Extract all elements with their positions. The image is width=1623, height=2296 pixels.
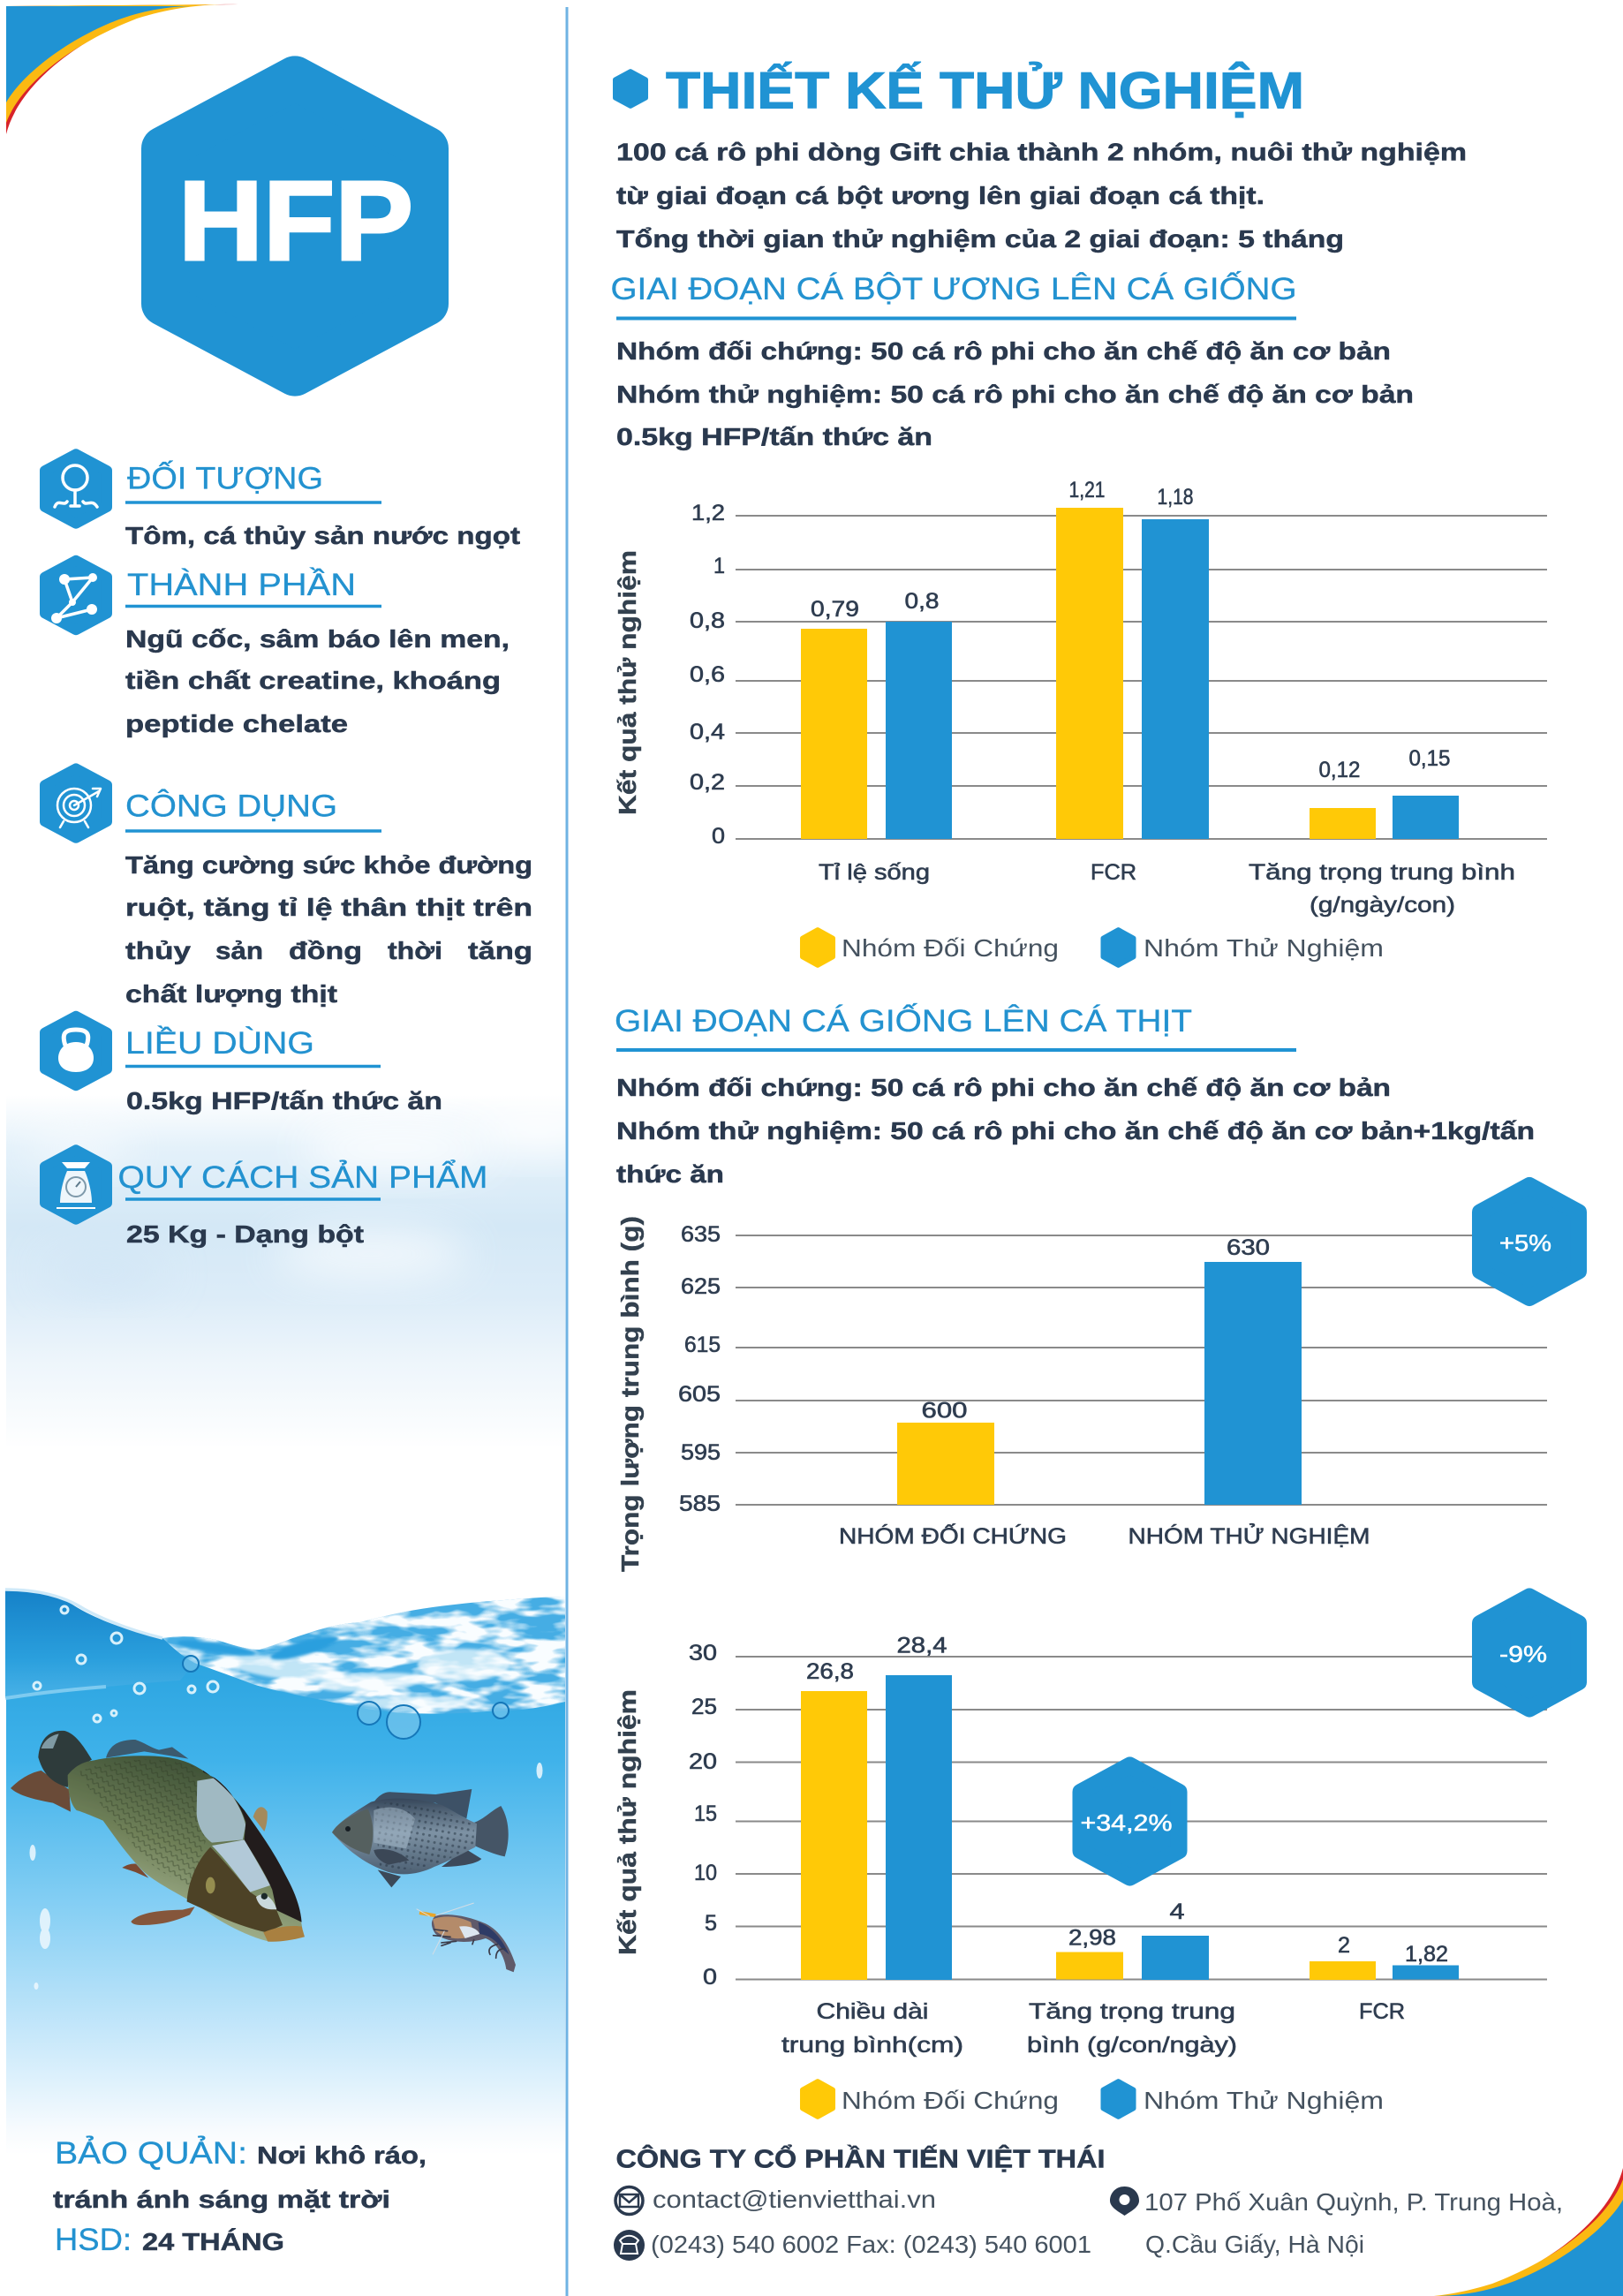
footer: company contact: 107 Phố Xuân Quỳnh, P. Trung Hoà, xyxy=(1144,2188,1563,2216)
icon: shrimp xyxy=(417,1903,516,1972)
storage and shelf life: tránh ánh sáng mặt trời xyxy=(53,2186,390,2213)
value labels: 2,98 xyxy=(1068,1925,1116,1950)
value labels: 26,8 xyxy=(806,1659,854,1684)
water wave xyxy=(5,1590,565,1739)
product logo: HFP hexagon: HFP xyxy=(178,158,413,284)
value labels: 4 xyxy=(1169,1899,1185,1924)
category labels: trung bình(cm) xyxy=(781,2033,963,2058)
value labels: 1,21 xyxy=(1068,478,1106,502)
y axis labels: 25 xyxy=(691,1695,717,1719)
footer: company contact xyxy=(614,2144,1563,2261)
corner: bottom right xyxy=(1391,2168,1623,2296)
bar chart: stage 2 results xyxy=(614,1597,1579,2117)
stage 1 groups: Nhóm thử nghiệm: 50 cá rô phi cho ăn chế độ ăn cơ bản xyxy=(616,381,1414,408)
y axis labels xyxy=(678,1222,721,1516)
legend xyxy=(803,2081,1384,2117)
y axis labels: 15 xyxy=(694,1801,717,1826)
icon: floating droplets xyxy=(30,1763,542,1990)
y axis labels xyxy=(690,501,725,849)
footer: company contact: contact@tienvietthai.vn xyxy=(653,2186,936,2213)
y axis labels: 585 xyxy=(679,1492,721,1516)
value labels: 600 xyxy=(922,1399,968,1424)
section: liều dùng xyxy=(45,1016,442,1114)
icon: molecule xyxy=(45,561,107,630)
body text: peptide chelate xyxy=(125,710,348,737)
body text: thời xyxy=(388,937,442,964)
body text xyxy=(125,851,532,1008)
y axis labels xyxy=(689,1641,717,1990)
icon: email xyxy=(615,2186,643,2215)
section: quy cách sản phẩm xyxy=(45,1150,487,1248)
body text: 25 Kg - Dạng bột xyxy=(126,1220,364,1248)
stage 2 groups: Nhóm đối chứng: 50 cá rô phi cho ăn chế độ ăn cơ bản xyxy=(616,1074,1391,1101)
category labels: Tăng trọng trung bình xyxy=(1249,860,1515,885)
y axis labels: 625 xyxy=(681,1274,721,1299)
y axis title: Kết quả thử nghiệm xyxy=(614,1689,641,1955)
vertical divider xyxy=(565,7,569,2296)
y axis labels: 0,8 xyxy=(690,608,725,633)
icon: kettlebell xyxy=(45,1016,107,1085)
trial description: 100 cá rô phi dòng Gift chia thành 2 nhóm, nuôi thử nghiệm xyxy=(616,138,1467,166)
legend: Nhóm Thử Nghiệm xyxy=(1144,2087,1384,2114)
icon: scale xyxy=(45,1150,107,1220)
stage 1 groups xyxy=(616,337,1414,450)
category labels: NHÓM ĐỐI CHỨNG xyxy=(839,1522,1067,1549)
heading: CÔNG DỤNG xyxy=(125,789,337,823)
stage 1 groups: Nhóm đối chứng: 50 cá rô phi cho ăn chế độ ăn cơ bản xyxy=(616,337,1391,365)
value labels: 0,8 xyxy=(904,589,940,614)
category labels: NHÓM THỬ NGHIỆM xyxy=(1129,1522,1370,1549)
trial description: từ giai đoạn cá bột ương lên giai đoạn cá thịt. xyxy=(616,182,1264,209)
legend xyxy=(803,930,1384,965)
y axis labels: 0 xyxy=(703,1965,717,1990)
value labels: 0,12 xyxy=(1319,758,1360,782)
icon: phone xyxy=(614,2230,645,2261)
category labels: Chiều dài xyxy=(816,1999,929,2024)
icon: big carp fish xyxy=(11,1731,305,1942)
y axis labels: 20 xyxy=(689,1749,717,1774)
bubbles xyxy=(34,1606,218,1722)
body text: thủy xyxy=(125,937,192,964)
y axis labels: 0 xyxy=(712,824,725,849)
trial description: Tổng thời gian thử nghiệm của 2 giai đoạn: 5 tháng xyxy=(616,225,1344,253)
storage and shelf life: BẢO QUẢN: xyxy=(55,2135,247,2171)
value labels: 2 xyxy=(1338,1933,1350,1958)
heading: stage 1: GIAI ĐOẠN CÁ BỘT ƯƠNG LÊN CÁ GIỐNG xyxy=(611,271,1296,306)
stage 2 groups: thức ăn xyxy=(616,1160,724,1188)
body text: ruột, tăng tỉ lệ thân thịt trên xyxy=(125,894,532,921)
legend: Nhóm Thử Nghiệm xyxy=(1144,934,1384,962)
category labels: FCR xyxy=(1091,860,1136,885)
footer: company contact: (0243) 540 6002 Fax: (0243) 540 6001 xyxy=(651,2231,1091,2258)
category labels xyxy=(819,860,1515,918)
y axis labels: 595 xyxy=(681,1440,721,1465)
heading: LIỀU DÙNG xyxy=(125,1025,314,1061)
body text xyxy=(125,625,510,737)
footer: company contact: CÔNG TY CỔ PHẦN TIẾN VIỆT THÁI xyxy=(616,2144,1106,2174)
category labels xyxy=(781,1999,1405,2058)
value labels xyxy=(811,478,1450,782)
legend: Nhóm Đối Chứng xyxy=(842,2087,1059,2114)
value labels: 28,4 xyxy=(897,1634,947,1658)
stage 2 groups xyxy=(616,1074,1535,1188)
value labels xyxy=(922,1235,1270,1424)
y axis labels: 1,2 xyxy=(691,501,725,525)
body text: tiền chất creatine, khoáng xyxy=(125,667,501,694)
y axis labels: 635 xyxy=(681,1222,721,1247)
corner: top left xyxy=(6,4,238,134)
y axis labels: 0,6 xyxy=(690,662,725,687)
icon: target xyxy=(45,768,107,838)
icon: location pin xyxy=(1110,2186,1139,2216)
callout: +34,2% xyxy=(1081,1765,1179,1877)
body text: Ngũ cốc, sâm báo lên men, xyxy=(125,625,510,653)
bar chart: average weight xyxy=(616,1185,1579,1572)
storage and shelf life: 24 THÁNG xyxy=(142,2228,284,2255)
category labels: FCR xyxy=(1359,1999,1405,2024)
storage and shelf life xyxy=(53,2135,427,2257)
storage and shelf life: Nơi khô ráo, xyxy=(257,2141,427,2169)
heading: THÀNH PHẦN xyxy=(127,567,356,602)
heading: ĐỐI TƯỢNG xyxy=(127,461,323,496)
callout: -9%: -9% xyxy=(1499,1641,1547,1667)
icon: magnifier xyxy=(45,454,107,524)
callout: +34,2%: +34,2% xyxy=(1081,1809,1173,1836)
y axis labels: 0,2 xyxy=(690,770,725,795)
y axis labels: 615 xyxy=(684,1333,721,1357)
category labels: bình (g/con/ngày) xyxy=(1027,2033,1237,2058)
y axis title: Kết quả thử nghiệm xyxy=(614,550,641,815)
body text: Tăng cường sức khỏe đường xyxy=(125,851,532,879)
y axis labels: 10 xyxy=(694,1861,717,1885)
left panel background xyxy=(5,1095,600,2155)
body text: đồng xyxy=(289,937,362,964)
category labels: Tỉ lệ sống xyxy=(819,860,930,885)
y axis labels: 1 xyxy=(713,554,725,578)
body text: 0.5kg HFP/tấn thức ăn xyxy=(126,1087,442,1114)
y axis title: Trọng lượng trung bình (g) xyxy=(616,1216,644,1572)
bars xyxy=(801,508,1459,839)
section: đối tượng xyxy=(45,454,520,549)
stage 1 groups: 0.5kg HFP/tấn thức ăn xyxy=(616,423,932,450)
category labels: Tăng trọng trung xyxy=(1029,1999,1235,2024)
category labels: (g/ngày/con) xyxy=(1310,893,1455,918)
main title: THIẾT KẾ THỬ NGHIỆM xyxy=(666,62,1304,120)
body text: sản xyxy=(215,937,263,964)
value labels xyxy=(806,1634,1448,1967)
callout: +5%: +5% xyxy=(1499,1229,1551,1256)
legend: Nhóm Đối Chứng xyxy=(842,934,1059,962)
y axis labels: 30 xyxy=(689,1641,717,1665)
body text: chất lượng thịt xyxy=(125,980,337,1008)
bars xyxy=(801,1675,1459,1980)
y axis labels: 605 xyxy=(678,1382,721,1407)
category labels xyxy=(839,1522,1370,1549)
icon: tilapia fish xyxy=(332,1789,509,1887)
value labels: 1,82 xyxy=(1405,1942,1448,1967)
y axis labels: 0,4 xyxy=(690,720,725,744)
storage and shelf life: HSD: xyxy=(55,2223,132,2257)
section: thành phần xyxy=(45,561,510,737)
heading: QUY CÁCH SẢN PHẨM xyxy=(118,1159,487,1195)
value labels: 0,15 xyxy=(1409,746,1450,771)
value labels: 630 xyxy=(1227,1235,1270,1260)
value labels: 1,18 xyxy=(1157,485,1194,510)
stage 2 groups: Nhóm thử nghiệm: 50 cá rô phi cho ăn chế độ ăn cơ bản+1kg/tấn xyxy=(616,1117,1535,1144)
bars xyxy=(897,1262,1302,1505)
body text: tăng xyxy=(468,937,532,964)
body text: Tôm, cá thủy sản nước ngọt xyxy=(125,522,520,549)
callout: -9% xyxy=(1480,1597,1579,1709)
value labels: 0,79 xyxy=(811,597,859,622)
footer: company contact: Q.Cầu Giấy, Hà Nội xyxy=(1145,2231,1364,2258)
section: công dụng xyxy=(45,768,532,1008)
trial description xyxy=(616,138,1467,253)
y axis labels: 5 xyxy=(705,1911,717,1936)
heading: stage 2: GIAI ĐOẠN CÁ GIỐNG LÊN CÁ THỊT xyxy=(615,1003,1192,1038)
bar chart: stage 1 results xyxy=(614,478,1547,965)
product logo: HFP hexagon xyxy=(163,78,427,374)
callout: +5% xyxy=(1480,1185,1579,1298)
